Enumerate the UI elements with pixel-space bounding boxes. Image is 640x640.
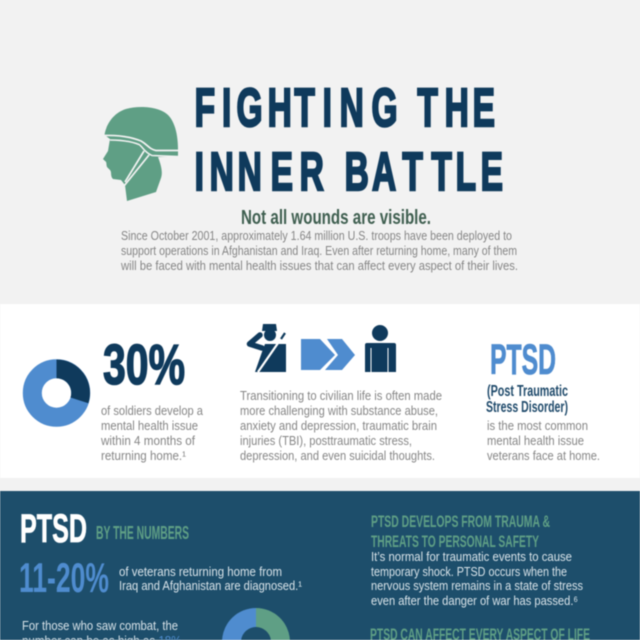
text: transition: depression, and even suicidal thoughts. [240, 448, 435, 463]
text: soldiers stat: of soldiers develop a [101, 403, 204, 418]
text: transition [240, 388, 442, 463]
heading: PTSD by the numbers: BY THE NUMBERS [96, 523, 189, 543]
text: soldiers stat: mental health issue [101, 418, 198, 433]
text: trauma explanation [371, 549, 583, 608]
text: trauma explanation: even after the danger of war has passed.⁶ [371, 593, 578, 608]
text: veterans diagnosed: Iraq and Afghanistan are diagnosed.¹ [119, 578, 303, 593]
text: transition: anxiety and depression, traumatic brain [240, 418, 437, 433]
text: soldiers stat [100, 403, 204, 463]
icon: civilian person [365, 325, 396, 372]
heading: post traumatic stress disorder: (Post Traumatic [487, 383, 568, 400]
heading: post traumatic stress disorder [486, 383, 568, 416]
title: FIGHTING THE [195, 78, 495, 138]
donut chart: combat [222, 608, 290, 640]
icon: saluting soldier [250, 324, 286, 372]
text: soldiers stat: returning home.¹ [101, 448, 187, 463]
arrow: transition [301, 339, 355, 370]
text: trauma explanation: It’s normal for traumatic events to cause [371, 549, 572, 564]
text: PTSD most common: veterans face at home. [487, 448, 600, 463]
heading: PTSD: PTSD [490, 336, 556, 384]
text: veterans diagnosed: of veterans returning home from [119, 564, 282, 579]
subtitle: Not all wounds are visible. [241, 207, 431, 229]
text: PTSD most common [487, 418, 600, 463]
intro paragraph: Since October 2001, approximately 1.64 million U.S. troops have been deployed to [121, 228, 512, 243]
title [195, 78, 503, 202]
text: PTSD most common: mental health issue [487, 433, 584, 448]
title: INNER BATTLE [195, 142, 503, 202]
heading: develops from trauma [371, 512, 550, 551]
icon: soldier head with helmet [103, 107, 178, 201]
text: trauma explanation: temporary shock. PTSD occurs when the [371, 564, 567, 579]
text: soldiers stat: within 4 months of [100, 433, 195, 448]
text: transition: Transitioning to civilian life is often made [240, 388, 442, 403]
heading: post traumatic stress disorder: Stress Disorder) [486, 399, 568, 416]
text: combat rate first line: For those who saw combat, the [22, 618, 178, 633]
heading: PTSD by the numbers [20, 507, 189, 551]
stat: 30 percent: 30% [103, 333, 185, 397]
donut chart: 30 percent [32, 359, 90, 417]
intro paragraph [120, 228, 518, 273]
stat: 11-20 percent: 11-20% [19, 554, 109, 601]
heading: PTSD by the numbers: PTSD [20, 507, 87, 551]
text: transition: injuries (TBI), posttraumatic stress, [240, 433, 412, 448]
text: transition: more challenging with substance abuse, [240, 403, 438, 418]
intro paragraph: support operations in Afghanistan and Iraq. Even after returning home, many of them [121, 243, 517, 258]
text: PTSD most common: is the most common [487, 418, 588, 433]
intro paragraph: will be faced with mental health issues that can affect every aspect of their lives. [120, 258, 518, 273]
text: trauma explanation: nervous system remains in a state of stress [371, 578, 583, 593]
text: veterans diagnosed [119, 564, 303, 593]
